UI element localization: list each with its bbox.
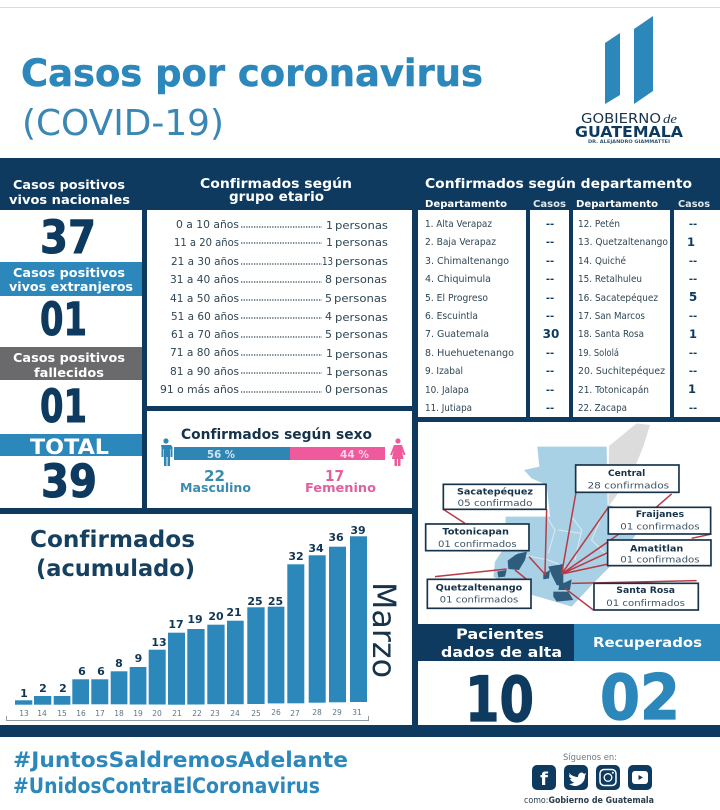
- panel: age groups: 91 o más años: [160, 383, 239, 396]
- panel: age groups: 31 a 40 años: [170, 273, 239, 286]
- callout: Fraijanes: [608, 507, 711, 534]
- panel: age groups: personas: [335, 273, 387, 286]
- panel: department table: 1. Alta Verapaz: [425, 219, 492, 230]
- heading: pacientes dados de alta: Pacientes: [456, 627, 544, 643]
- panel: department table: 19. Sololá: [578, 347, 619, 359]
- panel: department table: 21. Totonicapán: [578, 384, 649, 396]
- panel: age groups: 5: [325, 292, 332, 305]
- bar chart: 6: [97, 665, 105, 678]
- number: 01 fallecidos: 01: [40, 380, 87, 433]
- bar chart: 2: [59, 682, 67, 695]
- panel: department table: --: [546, 293, 554, 304]
- panel: department table: --: [689, 403, 697, 414]
- callout: Totonicapan: [426, 524, 529, 551]
- bar chart: 34: [308, 542, 324, 555]
- hashtags: #UnidosContraElCoronavirus: [13, 774, 320, 798]
- panel: age groups: 1: [326, 236, 333, 249]
- bar chart: 20: [208, 610, 224, 623]
- panel: department table: --: [689, 348, 697, 359]
- icon: man: [161, 438, 172, 466]
- heading: pacientes dados de alta: dados de alta: [441, 645, 562, 661]
- heading: pacientes dados de alta: [441, 627, 562, 661]
- panel: age groups: personas: [335, 311, 388, 324]
- panel: accumulated chart: [0, 514, 412, 725]
- panel: age groups: 1: [326, 347, 333, 360]
- panel: department table: 12. Petén: [578, 218, 620, 230]
- bar chart: 25: [251, 709, 261, 718]
- panel: department table: 22. Zacapa: [578, 403, 627, 414]
- heading: según departamento: [425, 177, 710, 210]
- callout: Quetzaltenango: [427, 579, 531, 608]
- panel: department table: --: [546, 311, 554, 322]
- panel: department table: --: [546, 219, 554, 230]
- heading: grupo etario: grupo etario: [229, 190, 324, 205]
- heading: según departamento: Departamento: [576, 199, 658, 210]
- bar chart: 17: [95, 709, 105, 718]
- panel: department table: 17. San Marcos: [578, 311, 645, 322]
- stat: femenino: [305, 467, 376, 495]
- bar chart: 15: [57, 709, 67, 718]
- bar chart: 25: [247, 595, 263, 608]
- stat: masculino: 22: [204, 467, 225, 485]
- heading: según departamento: Departamento: [425, 199, 507, 210]
- panel: department table: 10. Jalapa: [425, 385, 469, 396]
- social media block: Síguenos en:: [563, 753, 617, 763]
- panel: department table: --: [689, 256, 697, 267]
- callout: Central: 28 confirmados: [587, 481, 669, 491]
- panel: age groups: 0 a 10 años: [176, 218, 239, 231]
- panel: age groups: 21 a 30 años: [171, 255, 239, 268]
- panel: department table: 5. El Progreso: [425, 293, 488, 304]
- band: fallecidos: Casos positivos: [13, 350, 125, 365]
- logo: Gobierno de Guatemala: GUATEMALA: [575, 123, 683, 141]
- panel: department table: --: [546, 237, 554, 248]
- heading: según departamento: Confirmados según departamento: [425, 177, 692, 192]
- bar chart: 29: [332, 708, 342, 717]
- bar chart: 39: [350, 524, 366, 537]
- panel: department table: --: [546, 385, 554, 396]
- hashtags: [13, 748, 348, 798]
- band: total: TOTAL: [30, 435, 109, 459]
- band: vivos extranjeros: vivos extranjeros: [9, 279, 133, 294]
- panel: map of confirmed cases: [418, 422, 720, 624]
- heading: vivos nacionales: vivos nacionales: [9, 192, 130, 207]
- band: fallecidos: [0, 347, 142, 380]
- panel: department table: 4. Chiquimula: [425, 274, 491, 285]
- bar chart: 8: [115, 657, 123, 670]
- band: total: [0, 434, 142, 459]
- panel: department table: 8. Huehuetenango: [425, 348, 514, 359]
- callout: Sacatepéquez: Sacatepéquez: [457, 486, 533, 497]
- panel: age groups: 81 a 90 años: [170, 365, 239, 378]
- bar: share by sex: 56 %: [207, 449, 235, 461]
- callout: Totonicapan: Totonicapan: [442, 528, 509, 538]
- callout: Santa Rosa: 01 confirmados: [606, 599, 685, 609]
- title: Casos por coronavirus: [21, 52, 483, 95]
- stat: masculino: [180, 467, 251, 495]
- panel: national totals: [0, 177, 142, 508]
- heading: confirmados acumulado: [30, 527, 195, 582]
- panel: age groups: personas: [335, 236, 388, 249]
- panel: department table: --: [546, 274, 554, 285]
- panel: department table: --: [546, 348, 554, 359]
- callout: Central: Central: [608, 469, 645, 479]
- bar chart: 23: [210, 709, 220, 718]
- logo: Gobierno de Guatemala: DR. ALEJANDRO GIAMMATTEI: [588, 139, 671, 144]
- callout: Quetzaltenango: Quetzaltenango: [436, 584, 522, 594]
- stat: masculino: Masculino: [180, 480, 251, 495]
- panel: age groups: personas: [335, 348, 388, 361]
- bar chart: 32: [288, 550, 304, 563]
- callout: Santa Rosa: [594, 583, 698, 610]
- panel: department table: [418, 210, 720, 417]
- bar chart: 6: [78, 665, 86, 678]
- stat: femenino: 17: [325, 467, 344, 485]
- bar chart: 27: [290, 709, 300, 718]
- heading: recuperados: Recuperados: [593, 635, 702, 651]
- callout: Amatitlan: Amatitlan: [630, 544, 683, 554]
- bar chart: 16: [76, 709, 86, 718]
- icon: woman: [390, 438, 406, 466]
- heading: vivos nacionales: [9, 177, 130, 207]
- icon: youtube: [628, 765, 652, 790]
- bar: share by sex: [174, 447, 385, 461]
- heading: según sexo: Confirmados según sexo: [181, 427, 372, 443]
- panel: department table: --: [689, 366, 697, 377]
- bar chart: 1: [20, 687, 28, 700]
- panel: department table: 14. Quiché: [578, 255, 626, 267]
- heading: confirmados acumulado: Confirmados: [30, 527, 195, 553]
- panel: department table: 5: [689, 290, 697, 304]
- callout: Fraijanes: Fraijanes: [636, 510, 684, 520]
- panel: department table: 3. Chimaltenango: [425, 256, 509, 267]
- panel: department table: 13. Quetzaltenango: [578, 237, 668, 248]
- panel: age groups: personas: [334, 292, 387, 305]
- number: 02: 02: [600, 661, 680, 734]
- callout: Sacatepéquez: 05 confirmado: [457, 499, 532, 509]
- panel: department table: 30: [543, 327, 559, 341]
- bar chart: 19: [187, 613, 203, 626]
- callout: Totonicapan: 01 confirmados: [438, 540, 517, 550]
- panel: age groups: 51 a 60 años: [171, 310, 239, 323]
- bar chart: 20: [152, 709, 162, 718]
- heading: grupo etario: Confirmados según: [200, 177, 352, 192]
- number: 10: 10: [465, 663, 534, 736]
- bar chart: 2: [39, 682, 47, 695]
- panel: age groups: 5: [325, 328, 332, 341]
- icon: twitter: [564, 765, 588, 790]
- panel: department table: --: [689, 311, 697, 322]
- panel: department table: 18. Santa Rosa: [578, 329, 644, 340]
- title: (COVID-19): [22, 103, 224, 144]
- panel: age groups: 61 a 70 años: [171, 328, 239, 341]
- bar chart: 24: [230, 709, 240, 718]
- panel: department table: 16. Sacatepéquez: [578, 292, 658, 304]
- panel: age groups: personas: [335, 383, 388, 396]
- heading: confirmados acumulado: (acumulado): [36, 556, 195, 582]
- panel: department table: --: [689, 219, 697, 230]
- panel: age groups: 0: [325, 383, 332, 396]
- callout: Quetzaltenango: 01 confirmados: [440, 596, 519, 606]
- panel: age groups: 1: [326, 219, 333, 232]
- panel: department table: 1: [689, 327, 697, 341]
- band: fallecidos: fallecidos: [34, 365, 104, 380]
- panel: age groups: 4: [325, 310, 332, 323]
- heading: según departamento: Casos: [678, 199, 710, 210]
- bar chart: 14: [37, 709, 47, 718]
- bar chart: 19: [133, 709, 143, 718]
- bar chart: 36: [328, 531, 344, 544]
- panel: department table: 2. Baja Verapaz: [425, 237, 496, 248]
- panel: age groups: 8: [325, 273, 332, 286]
- callout: Santa Rosa: Santa Rosa: [616, 586, 675, 596]
- bar: share by sex: 44 %: [340, 449, 369, 461]
- panel: department table: 6. Escuintla: [425, 311, 478, 322]
- bar chart: 25: [268, 595, 283, 608]
- callout: Amatitlan: [608, 540, 711, 566]
- callout: Fraijanes: 01 confirmados: [620, 522, 700, 532]
- panel: department table: 7. Guatemala: [425, 329, 489, 340]
- panel: department table: 15. Retalhuleu: [578, 274, 642, 285]
- number: 37: 37: [40, 211, 96, 264]
- panel: age groups: personas: [335, 255, 388, 268]
- panel: age groups: personas: [335, 219, 388, 232]
- panel: department table: --: [546, 256, 554, 267]
- panel: age groups: 1: [326, 365, 333, 378]
- stat: femenino: Femenino: [305, 480, 376, 495]
- connector lines: [435, 492, 712, 610]
- panel: age groups: personas: [335, 366, 388, 379]
- panel: department table: --: [689, 274, 697, 285]
- bar chart: 21: [172, 709, 182, 718]
- credit line: como:Gobierno de Guatemala: [524, 796, 654, 806]
- heading: vivos nacionales: Casos positivos: [13, 177, 125, 192]
- panel: age groups: 13: [322, 255, 333, 268]
- panel: age groups: 41 a 50 años: [170, 292, 239, 305]
- panel: department table: 11. Jutiapa: [425, 403, 472, 414]
- bar chart: 28: [312, 708, 322, 717]
- logo: Gobierno de Guatemala: GOBIERNO: [581, 112, 661, 127]
- panel: confirmed by sex: [147, 411, 412, 508]
- panel: discharged and recovered: [418, 624, 720, 736]
- bar chart: 13: [151, 636, 167, 649]
- callout: Amatitlan: 01 confirmados: [620, 556, 700, 566]
- band: vivos extranjeros: Casos positivos: [13, 265, 125, 280]
- map: Guatemala: [493, 423, 650, 607]
- heading: según departamento: Casos: [533, 199, 566, 210]
- callout: Sacatepéquez: [443, 484, 546, 509]
- panel: age groups: 11 a 20 años: [174, 236, 239, 249]
- panel: age groups: 71 a 80 años: [170, 346, 239, 359]
- panel: age groups: [147, 210, 412, 406]
- logo: Gobierno de Guatemala: de: [663, 111, 677, 126]
- callout: Central: [576, 465, 679, 492]
- hashtags: #JuntosSaldremosAdelante: [13, 748, 348, 772]
- panel: department table: 20. Suchitepéquez: [578, 365, 665, 377]
- panel: department table: --: [546, 366, 554, 377]
- social media block: [524, 753, 654, 806]
- heading: recuperados: [574, 624, 720, 661]
- heading: grupo etario: [200, 177, 352, 205]
- panel: department table: 1: [688, 382, 696, 396]
- navy background band: [0, 158, 720, 737]
- bar chart: 22: [192, 709, 202, 718]
- logo: Gobierno de Guatemala: [575, 16, 683, 144]
- bar chart: 9: [135, 652, 142, 665]
- icon: instagram: [596, 765, 620, 790]
- label: Marzo: Marzo: [365, 582, 403, 678]
- panel: department table: --: [546, 403, 554, 414]
- bar chart: 18: [114, 709, 124, 718]
- bar chart: [6, 524, 368, 720]
- title: [21, 52, 483, 144]
- panel: department table: 9. Izabal: [425, 366, 463, 377]
- bar chart: 26: [271, 708, 281, 717]
- bar chart: 21: [226, 606, 242, 619]
- panel: age groups: personas: [335, 328, 388, 341]
- number: 01 extranjeros: 01: [40, 293, 87, 346]
- band: vivos extranjeros: [0, 262, 142, 296]
- bar chart: 31: [352, 708, 362, 717]
- panel: department table: 1: [687, 235, 695, 249]
- bar chart: 13: [19, 709, 29, 718]
- bar chart: 17: [168, 618, 184, 631]
- number: 39: 39: [41, 455, 97, 508]
- icon: facebook: f: [540, 769, 548, 790]
